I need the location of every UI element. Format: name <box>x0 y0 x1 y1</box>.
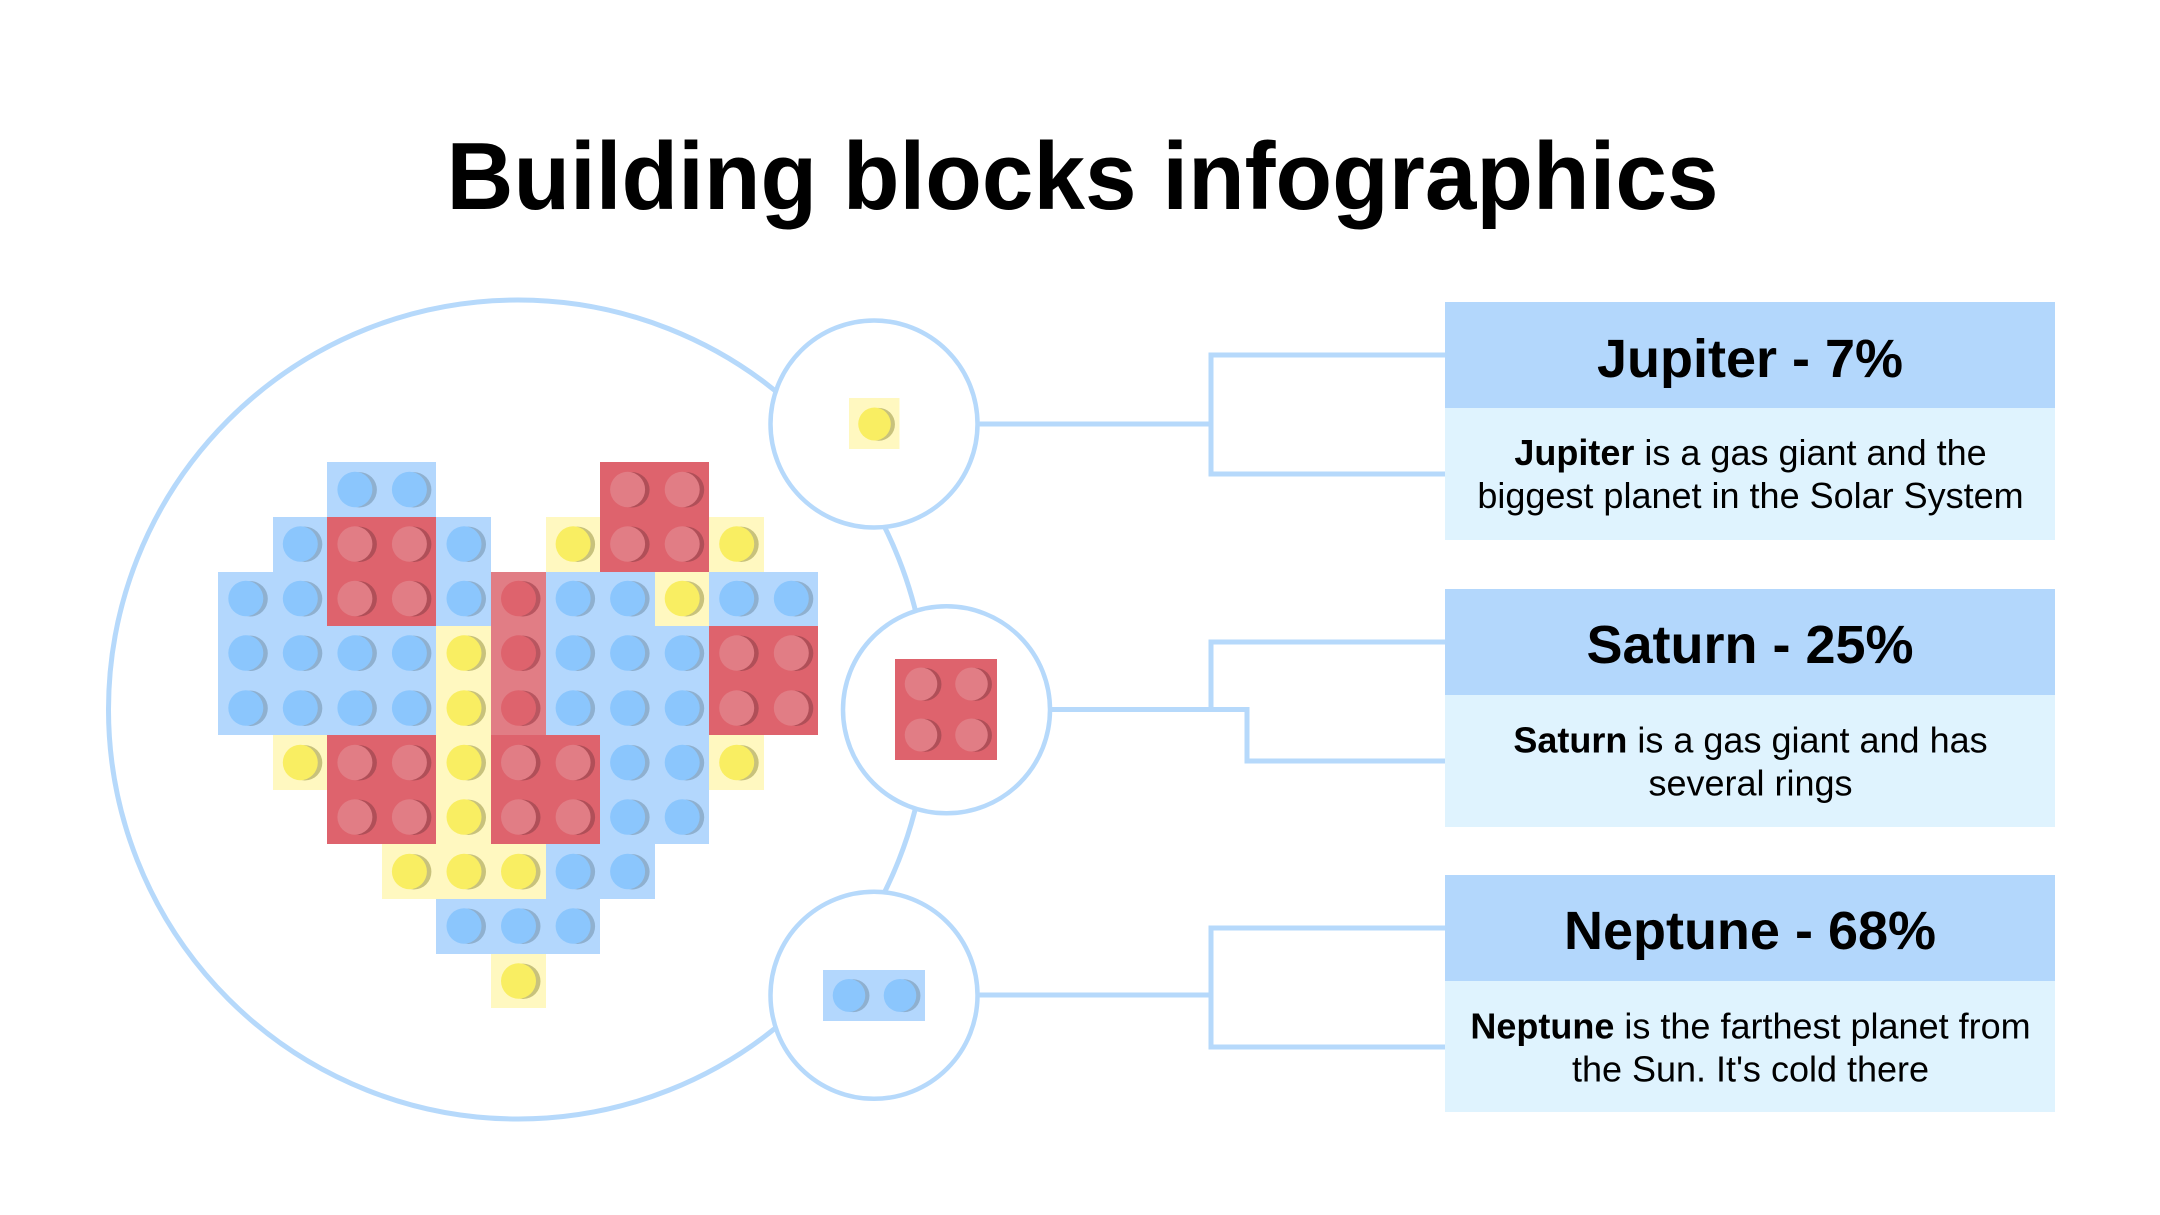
title: Building blocks infographics <box>446 123 1718 230</box>
small circle: blue brick <box>770 892 978 1099</box>
panel: Saturn <box>1445 589 2055 827</box>
pink brick column <box>491 572 546 735</box>
Jupiter description: biggest planet in the Solar System <box>1477 475 2024 516</box>
connector: Saturn <box>1051 642 1448 761</box>
panel: Jupiter <box>1445 302 2055 540</box>
small circle: red brick <box>843 606 1050 813</box>
large circle outline <box>108 300 928 1119</box>
Saturn description: Saturn is a gas giant and has <box>1513 719 1988 760</box>
Saturn heading: Saturn - 25% <box>1586 615 1914 675</box>
Jupiter heading: Jupiter - 7% <box>1597 329 1903 389</box>
Neptune heading: Neptune - 68% <box>1564 901 1936 961</box>
yellow bricks <box>273 517 764 1008</box>
red bricks <box>327 462 818 844</box>
connector: Neptune <box>976 928 1448 1047</box>
Neptune description: Neptune is the farthest planet from <box>1470 1005 2031 1046</box>
Jupiter description: Jupiter is a gas giant and the <box>1514 432 1987 473</box>
panel: Neptune <box>1445 875 2055 1112</box>
blue bricks <box>218 462 818 954</box>
heart made of building blocks <box>218 462 818 1008</box>
Neptune description: the Sun. It's cold there <box>1572 1048 1929 1089</box>
Saturn description: several rings <box>1648 762 1853 803</box>
small circle: yellow brick <box>770 320 978 528</box>
connector: Jupiter <box>976 355 1448 474</box>
